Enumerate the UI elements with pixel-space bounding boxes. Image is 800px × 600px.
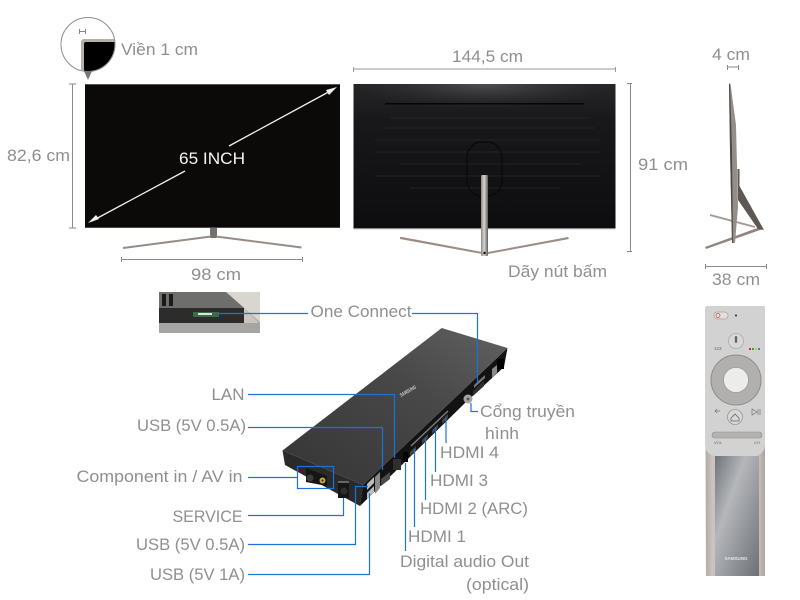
- One Connect box: [282, 328, 508, 506]
- label: button strip: Dãy nút bấm: [508, 262, 607, 281]
- port labels: USB (5V 0.5A): [136, 535, 245, 554]
- arrow: screen diagonal: [88, 87, 337, 223]
- port labels: One Connect: [310, 302, 412, 321]
- component ports plate: [306, 468, 327, 486]
- remote control: SAMSUNG: [724, 556, 748, 561]
- box top face: [282, 328, 508, 485]
- port labels: HDMI 4: [440, 443, 499, 462]
- remote color dots: [749, 348, 760, 350]
- remote control: CH: [754, 440, 760, 445]
- front view stand: [123, 228, 302, 248]
- port labels: SERVICE: [172, 507, 242, 526]
- dimension: width 144,5 cm: [354, 47, 616, 72]
- port labels: Digital audio Out: [400, 552, 529, 571]
- HDMI and LAN strip: [375, 472, 380, 494]
- back view stand: [400, 175, 569, 256]
- front view TV panel: [85, 84, 340, 228]
- remote home button: [728, 410, 742, 424]
- box front face: [360, 348, 508, 506]
- service port: [338, 482, 349, 498]
- remote power button: [714, 312, 728, 319]
- dimension: height 82,6 cm: [7, 84, 76, 228]
- port labels: Cổng truyền: [480, 402, 575, 421]
- port labels: HDMI 2 (ARC): [420, 499, 528, 518]
- remote mic button: [728, 334, 744, 348]
- remote volume and channel bars: [712, 432, 762, 438]
- side view TV: [705, 84, 764, 249]
- dimension: stand width 98 cm: 98 cm: [191, 265, 241, 284]
- port labels: Component in / AV in: [76, 467, 242, 486]
- dimension: depth 4 cm: 4 cm: [712, 45, 750, 64]
- antenna connector: [464, 394, 472, 404]
- heading: 65 inch: 65 INCH: [179, 149, 245, 168]
- dimension: stand depth 38 cm: 38 cm: [712, 270, 760, 289]
- label: bezel: Viền 1 cm: [121, 40, 198, 59]
- dimension: total height 91 cm: 91 cm: [638, 155, 688, 174]
- dimension: height 82,6 cm: 82,6 cm: [7, 146, 70, 165]
- remote control: [705, 306, 765, 576]
- callout lines: [218, 314, 478, 574]
- photo: button strip close-up: [159, 292, 260, 333]
- box left side face: [282, 450, 363, 506]
- box logo: SAMSUNG: [399, 384, 418, 399]
- port labels: HDMI 3: [430, 471, 488, 490]
- dimension: stand depth 38 cm: [706, 264, 766, 289]
- USB ports: [367, 477, 374, 490]
- port labels: HDMI 1: [408, 527, 466, 546]
- back view TV panel: [354, 84, 616, 229]
- port labels: hình: [485, 424, 519, 443]
- remote directional ring: [711, 355, 761, 405]
- port labels: USB (5V 0.5A): [137, 416, 246, 435]
- port labels: LAN: [212, 385, 244, 404]
- remote control: 123: [714, 346, 722, 351]
- dimension: width 144,5 cm: 144,5 cm: [452, 47, 523, 66]
- port labels: [76, 302, 575, 594]
- dimension: total height 91 cm: [627, 84, 688, 252]
- dimension: stand width 98 cm: [122, 257, 302, 284]
- port labels: (optical): [466, 575, 529, 594]
- remote control: VOL: [714, 440, 723, 445]
- port labels: USB (5V 1A): [150, 565, 245, 584]
- inset: bezel detail: [60, 17, 116, 80]
